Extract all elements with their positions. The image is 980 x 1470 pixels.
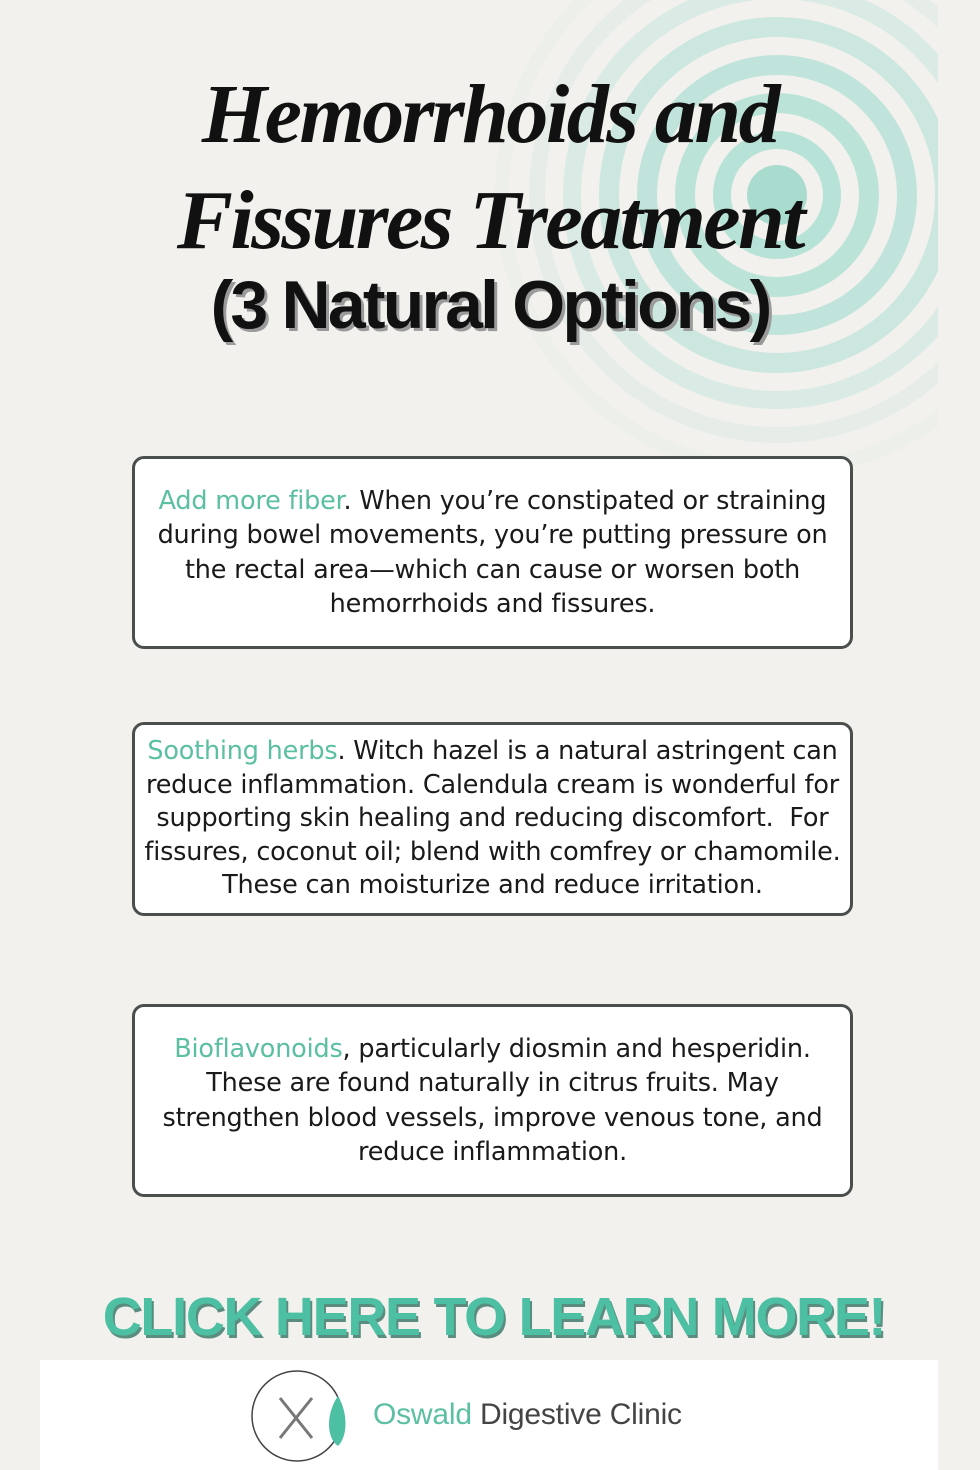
panel: fiber: the rectal area—which can cause or worsen both — [185, 554, 800, 584]
panel: herbs: reduce inflammation. Calendula cream is wonderful for — [146, 770, 839, 800]
panel: herbs: These can moisturize and reduce irritation. — [222, 870, 763, 900]
panel: bioflavonoids: Bioflavonoids, particularly diosmin and hesperidin. — [174, 1034, 811, 1064]
panel: herbs: fissures, coconut oil; blend with comfrey or chamomile. — [144, 837, 841, 867]
icon: logo circle with utensils and leaf — [251, 1370, 346, 1462]
panel: fiber: hemorrhoids and fissures. — [330, 589, 655, 619]
panel: herbs: supporting skin healing and reducing discomfort. For — [156, 803, 829, 833]
call to action: CLICK HERE TO LEARN MORE! — [103, 1287, 885, 1347]
title — [176, 68, 808, 267]
panel: fiber — [132, 456, 853, 649]
title: Fissures Treatment — [177, 174, 803, 267]
panel: herbs — [132, 722, 853, 916]
panel: bioflavonoids: strengthen blood vessels, improve venous tone, and — [162, 1102, 822, 1132]
footer logo band — [40, 1360, 938, 1470]
panel: fiber: Add more fiber. When you’re constipated or straining — [159, 486, 826, 516]
panel: fiber: during bowel movements, you’re putting pressure on — [158, 520, 827, 550]
panel: bioflavonoids — [132, 1004, 853, 1197]
subtitle: (3 Natural Options) — [211, 267, 769, 343]
clinic name: Oswald Digestive Clinic — [373, 1398, 682, 1431]
panel: bioflavonoids: These are found naturally in citrus fruits. May — [206, 1068, 779, 1098]
panel: bioflavonoids: reduce inflammation. — [358, 1137, 627, 1167]
title: Hemorrhoids and — [202, 68, 778, 161]
panel: herbs: Soothing herbs. Witch hazel is a natural astringent can — [147, 736, 838, 766]
